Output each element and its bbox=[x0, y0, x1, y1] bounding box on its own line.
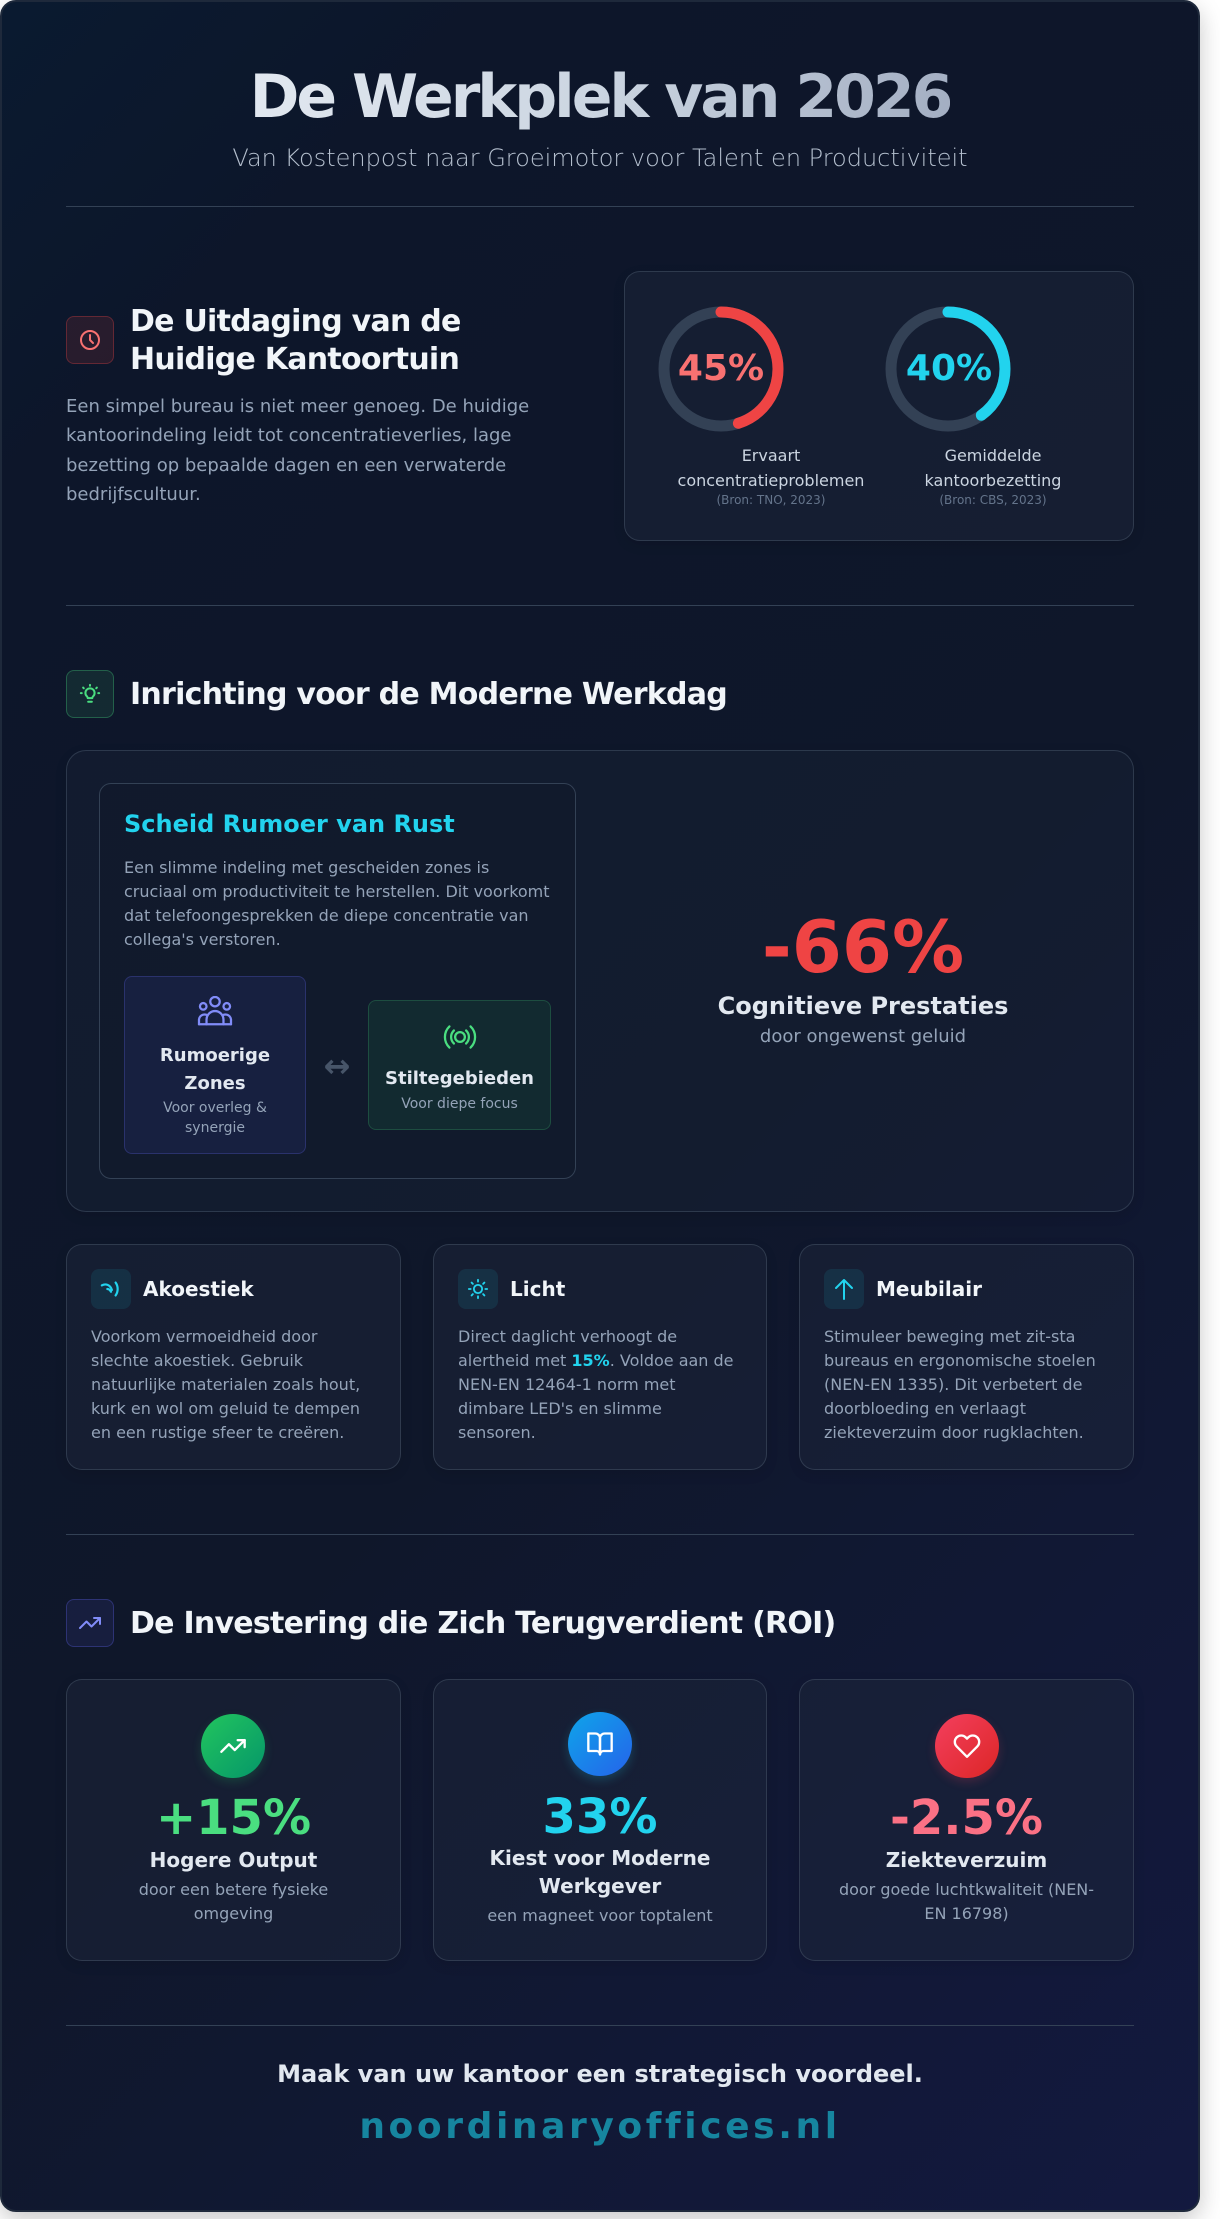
section heading: roi bbox=[66, 1599, 836, 1647]
card text bbox=[458, 1327, 734, 1442]
zone title: Rumoerige bbox=[160, 1045, 270, 1066]
icon: arrow up bbox=[824, 1269, 864, 1309]
intro paragraph: bedrijfscultuur. bbox=[66, 484, 201, 505]
stat: -66% bbox=[718, 905, 1008, 1047]
card text: (NEN-EN 1335). Dit verbetert de bbox=[824, 1375, 1082, 1394]
icon: sound bbox=[91, 1269, 131, 1309]
intro paragraph: kantoorindeling leidt tot concentratieverlies, lage bbox=[66, 425, 512, 446]
icon: signal bbox=[444, 1025, 476, 1049]
note: EN 16798) bbox=[924, 1904, 1009, 1923]
heading text: De Investering die Zich Terugverdient (ROI) bbox=[130, 1606, 836, 1641]
card text: Direct daglicht verhoogt de bbox=[458, 1327, 677, 1346]
value: 40% bbox=[906, 348, 992, 389]
label: Ziekteverzuim bbox=[886, 1848, 1047, 1872]
card: ziekteverzuim bbox=[799, 1679, 1134, 1961]
value: 33% bbox=[543, 1789, 657, 1845]
description: dat telefoongesprekken de diepe concentratie van bbox=[124, 906, 529, 925]
zone note bbox=[163, 1100, 267, 1136]
subtitle: Van Kostenpost naar Groeimotor voor Talent en Productiviteit bbox=[232, 144, 968, 172]
label bbox=[490, 1846, 710, 1898]
icon: trending up bbox=[201, 1714, 265, 1778]
card text: dimbare LED's en slimme bbox=[458, 1399, 662, 1418]
section heading: uitdaging bbox=[66, 304, 461, 376]
card text: Stimuleer beweging met zit-sta bbox=[824, 1327, 1075, 1346]
donut label: 45%: (Bron: TNO, 2023) bbox=[716, 493, 826, 507]
website: noordinaryoffices.nl bbox=[359, 2106, 841, 2147]
icon: book bbox=[568, 1712, 632, 1776]
panel: zones bbox=[66, 750, 1134, 1212]
intro paragraph: bezetting op bepaalde dagen en een verwaterde bbox=[66, 455, 506, 476]
label: Kiest voor Moderne bbox=[490, 1846, 710, 1870]
icon: clock bbox=[66, 316, 114, 364]
donut label: 40%: (Bron: CBS, 2023) bbox=[939, 493, 1047, 507]
note: een magneet voor toptalent bbox=[487, 1906, 713, 1925]
note bbox=[139, 1880, 328, 1923]
icon: trending up bbox=[66, 1599, 114, 1647]
label: Hogere Output bbox=[150, 1848, 317, 1872]
note: door ongewenst geluid bbox=[760, 1026, 966, 1047]
panel: scheid rumoer van rust bbox=[99, 783, 576, 1179]
intro paragraph bbox=[66, 396, 529, 505]
card title: Akoestiek bbox=[143, 1277, 254, 1301]
zone title: Stiltegebieden bbox=[385, 1068, 534, 1089]
call to action: Maak van uw kantoor een strategisch voordeel. bbox=[277, 2060, 923, 2088]
card text: Voorkom vermoeidheid door bbox=[91, 1327, 317, 1346]
card: akoestiek bbox=[66, 1244, 401, 1470]
icon: light bulb bbox=[66, 670, 114, 718]
card: werkgever bbox=[433, 1679, 767, 1961]
intro paragraph: Een simpel bureau is niet meer genoeg. De huidige bbox=[66, 396, 529, 417]
icon: heart bbox=[935, 1714, 999, 1778]
sub heading: Scheid Rumoer van Rust bbox=[124, 810, 455, 838]
note: omgeving bbox=[194, 1904, 273, 1923]
heading text bbox=[130, 304, 461, 376]
card text: sensoren. bbox=[458, 1423, 536, 1442]
donut label: 40% bbox=[925, 446, 1061, 507]
card text: kurk en wol om geluid te dempen bbox=[91, 1399, 360, 1418]
heading text: Inrichting voor de Moderne Werkdag bbox=[130, 677, 727, 712]
description: cruciaal om productiviteit te herstellen. Dit voorkomt bbox=[124, 882, 550, 901]
card text: en een rustige sfeer te creëren. bbox=[91, 1423, 344, 1442]
heading text: Huidige Kantoortuin bbox=[130, 342, 459, 376]
zone: rumoerig bbox=[124, 976, 306, 1154]
card: licht bbox=[433, 1244, 767, 1470]
icon: people bbox=[198, 996, 232, 1026]
value: 45% bbox=[678, 348, 764, 389]
card text: NEN-EN 12464-1 norm met bbox=[458, 1375, 676, 1394]
card title: Meubilair bbox=[876, 1277, 982, 1301]
panel: statistics bbox=[624, 271, 1134, 541]
zone note: synergie bbox=[185, 1120, 245, 1136]
label: Werkgever bbox=[539, 1874, 661, 1898]
card text bbox=[824, 1327, 1096, 1442]
note bbox=[839, 1880, 1094, 1923]
arrow: double: ↔ bbox=[324, 1047, 350, 1085]
zone title bbox=[160, 1045, 270, 1094]
donut chart: 40% bbox=[886, 306, 1010, 432]
card: meubilair bbox=[799, 1244, 1134, 1470]
card title: Licht bbox=[510, 1277, 565, 1301]
donut label: 45% bbox=[678, 446, 864, 507]
value: -2.5% bbox=[890, 1790, 1043, 1846]
label: Cognitieve Prestaties bbox=[718, 992, 1008, 1020]
card text: natuurlijke materialen zoals hout, bbox=[91, 1375, 360, 1394]
card: output bbox=[66, 1679, 401, 1961]
section heading: inrichting bbox=[66, 670, 727, 718]
card text: slechte akoestiek. Gebruik bbox=[91, 1351, 303, 1370]
heading text: De Uitdaging van de bbox=[130, 304, 461, 339]
description bbox=[124, 858, 550, 949]
donut chart: 45% bbox=[658, 306, 784, 432]
donut label: 45%: concentratieproblemen bbox=[678, 470, 864, 490]
card text: doorbloeding en verlaagt bbox=[824, 1399, 1026, 1418]
title: De Werkplek van 2026 bbox=[250, 62, 950, 132]
donut label: 40%: Gemiddelde bbox=[945, 446, 1041, 465]
card text: ziekteverzuim door rugklachten. bbox=[824, 1423, 1084, 1442]
donut label: 45%: Ervaart bbox=[742, 446, 800, 465]
zone note: Voor overleg & bbox=[163, 1100, 267, 1116]
zone title: Zones bbox=[184, 1073, 246, 1094]
value: -66% bbox=[762, 905, 964, 989]
zone note: Voor diepe focus bbox=[401, 1096, 518, 1112]
zone: stilte bbox=[368, 1000, 551, 1130]
description: collega's verstoren. bbox=[124, 930, 281, 949]
note: door goede luchtkwaliteit (NEN- bbox=[839, 1880, 1094, 1899]
card text: alertheid met 15%. Voldoe aan de bbox=[458, 1351, 734, 1370]
card text bbox=[91, 1327, 360, 1442]
card text: bureaus en ergonomische stoelen bbox=[824, 1351, 1096, 1370]
icon: sun bbox=[458, 1269, 498, 1309]
value: +15% bbox=[156, 1790, 311, 1846]
description: Een slimme indeling met gescheiden zones is bbox=[124, 858, 489, 877]
note: door een betere fysieke bbox=[139, 1880, 328, 1899]
donut label: 40%: kantoorbezetting bbox=[925, 470, 1061, 490]
